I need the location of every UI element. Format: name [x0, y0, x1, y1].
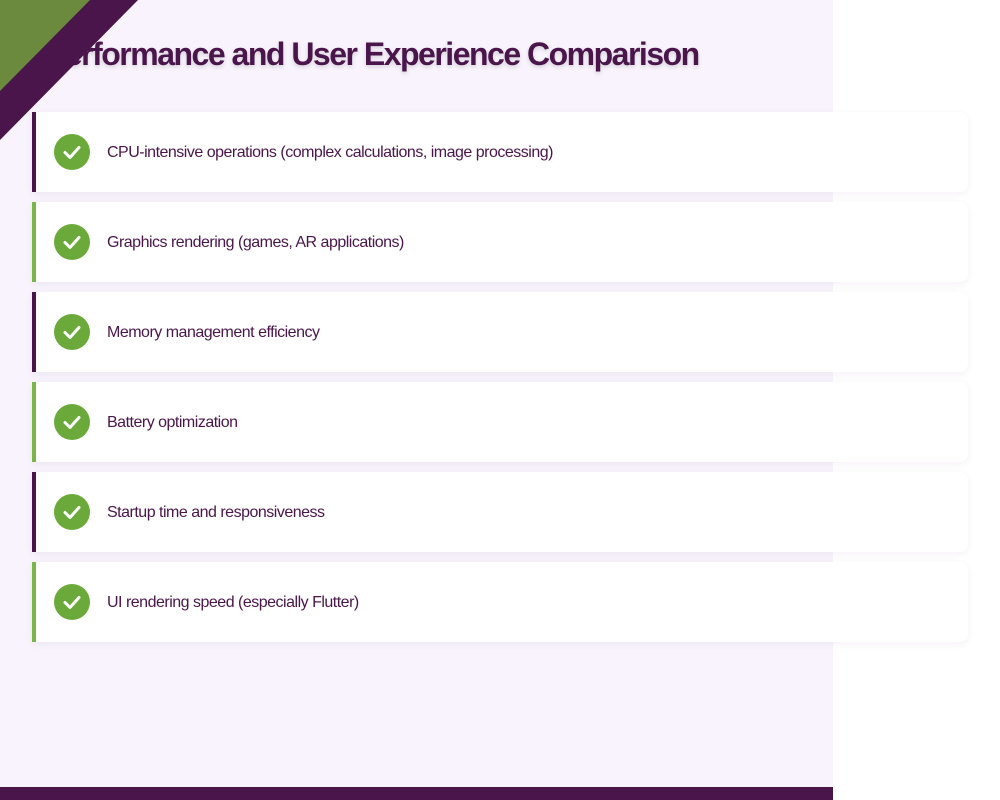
card: memory — [32, 292, 968, 372]
icon: check — [54, 494, 90, 530]
card: UI rendering — [32, 562, 968, 642]
icon: check — [54, 224, 90, 260]
card: startup: Startup time and responsiveness — [107, 504, 325, 521]
card: CPU — [32, 112, 968, 192]
card: graphics: Graphics rendering (games, AR applications) — [107, 234, 404, 251]
corner decoration — [0, 0, 138, 140]
card: memory: Memory management efficiency — [107, 324, 319, 341]
card: battery — [32, 382, 968, 462]
card: battery: Battery optimization — [107, 414, 238, 431]
card: graphics — [32, 202, 968, 282]
card: startup — [32, 472, 968, 552]
card: UI rendering: UI rendering speed (especially Flutter) — [107, 594, 359, 611]
card: CPU: CPU-intensive operations (complex calculations, image processing) — [107, 144, 553, 161]
icon: check — [54, 134, 90, 170]
icon: check — [54, 404, 90, 440]
title: Performance and User Experience Comparison — [45, 36, 699, 72]
icon: check — [54, 314, 90, 350]
footer bar — [0, 787, 833, 800]
icon: check — [54, 584, 90, 620]
